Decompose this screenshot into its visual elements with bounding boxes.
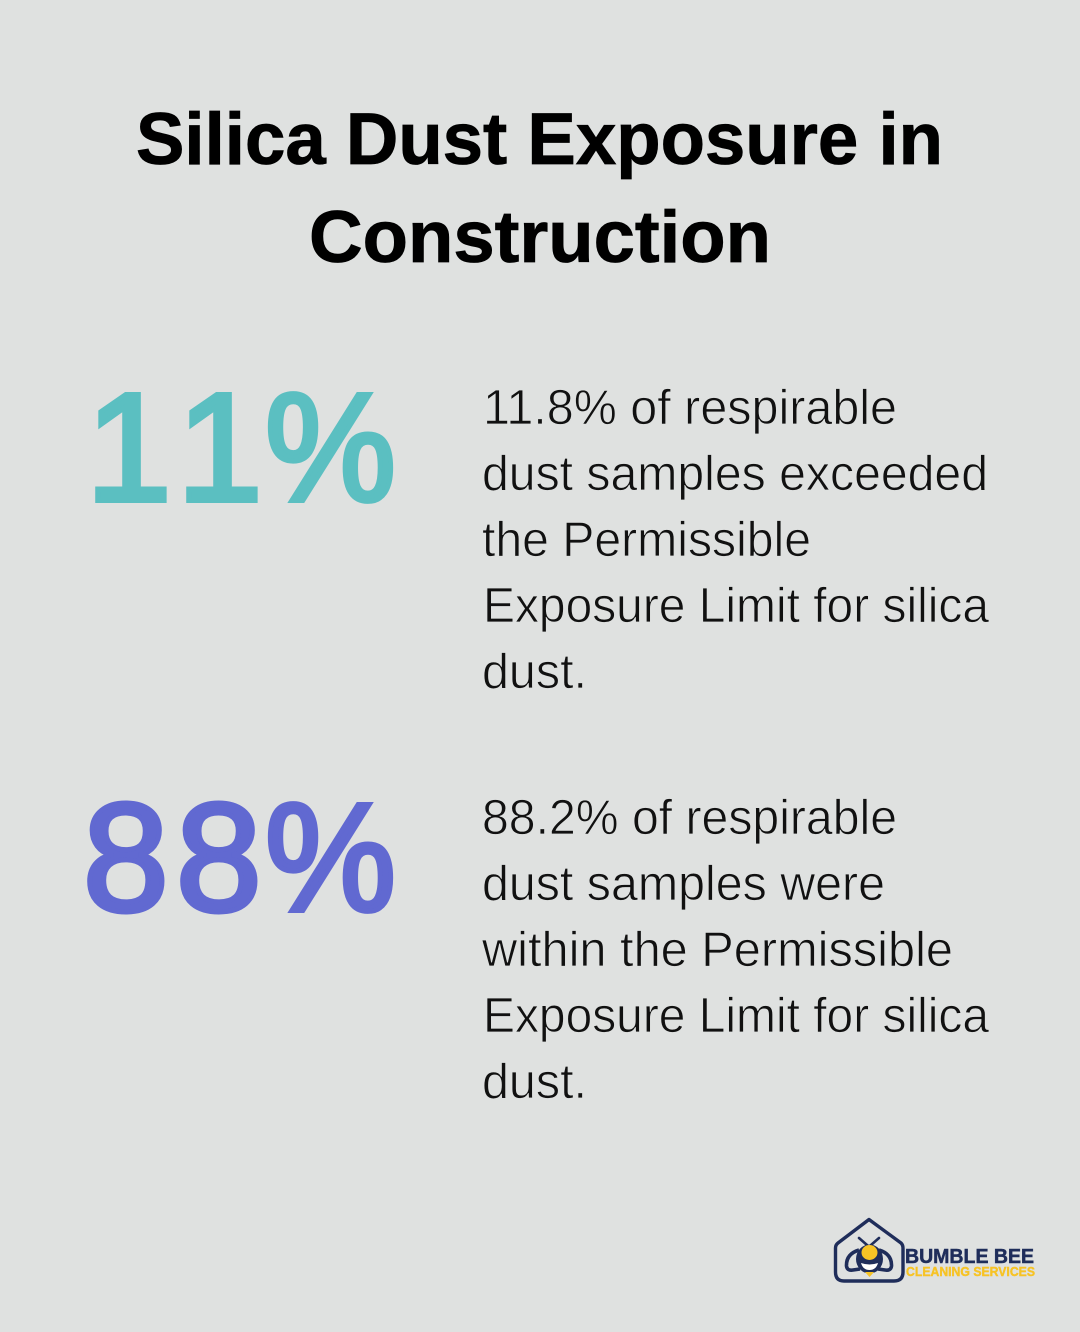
text block: 11.8% exceeded the limit bbox=[482, 381, 990, 699]
title: Silica Dust Exposure in bbox=[136, 99, 943, 180]
stat: 11% bbox=[86, 362, 396, 534]
text block: 11.8% exceeded the limit: the Permissible bbox=[482, 513, 811, 567]
stat: 11%: % bbox=[265, 362, 396, 534]
text block: 88.2% within the limit: Exposure Limit for silica bbox=[483, 989, 990, 1043]
text block: 88.2% within the limit: 88.2% of respirable bbox=[482, 791, 897, 845]
logo wordmark: BUMBLE BEE bbox=[905, 1246, 1034, 1268]
text block: 88.2% within the limit bbox=[481, 791, 990, 1109]
text block: 11.8% exceeded the limit: dust samples exceeded bbox=[482, 447, 988, 501]
title: Construction bbox=[309, 197, 771, 278]
text block: 11.8% exceeded the limit: 11.8% of respirable bbox=[483, 381, 897, 435]
stat: 88% bbox=[83, 772, 396, 944]
title bbox=[136, 99, 943, 278]
icon: house outline with bee bbox=[836, 1220, 903, 1281]
stat: 88%: % bbox=[265, 772, 396, 944]
text block: 11.8% exceeded the limit: dust. bbox=[482, 645, 587, 699]
stat: 11%: 11 bbox=[86, 362, 263, 534]
text block: 88.2% within the limit: within the Permissible bbox=[481, 923, 953, 977]
stat: 88%: 88 bbox=[83, 772, 262, 944]
text block: 88.2% within the limit: dust samples were bbox=[482, 857, 885, 911]
text block: 88.2% within the limit: dust. bbox=[482, 1055, 587, 1109]
text block: 11.8% exceeded the limit: Exposure Limit for silica bbox=[483, 579, 990, 633]
logo: Bumble Bee Cleaning Services bbox=[836, 1220, 1035, 1281]
logo tagline: CLEANING SERVICES bbox=[906, 1265, 1035, 1279]
